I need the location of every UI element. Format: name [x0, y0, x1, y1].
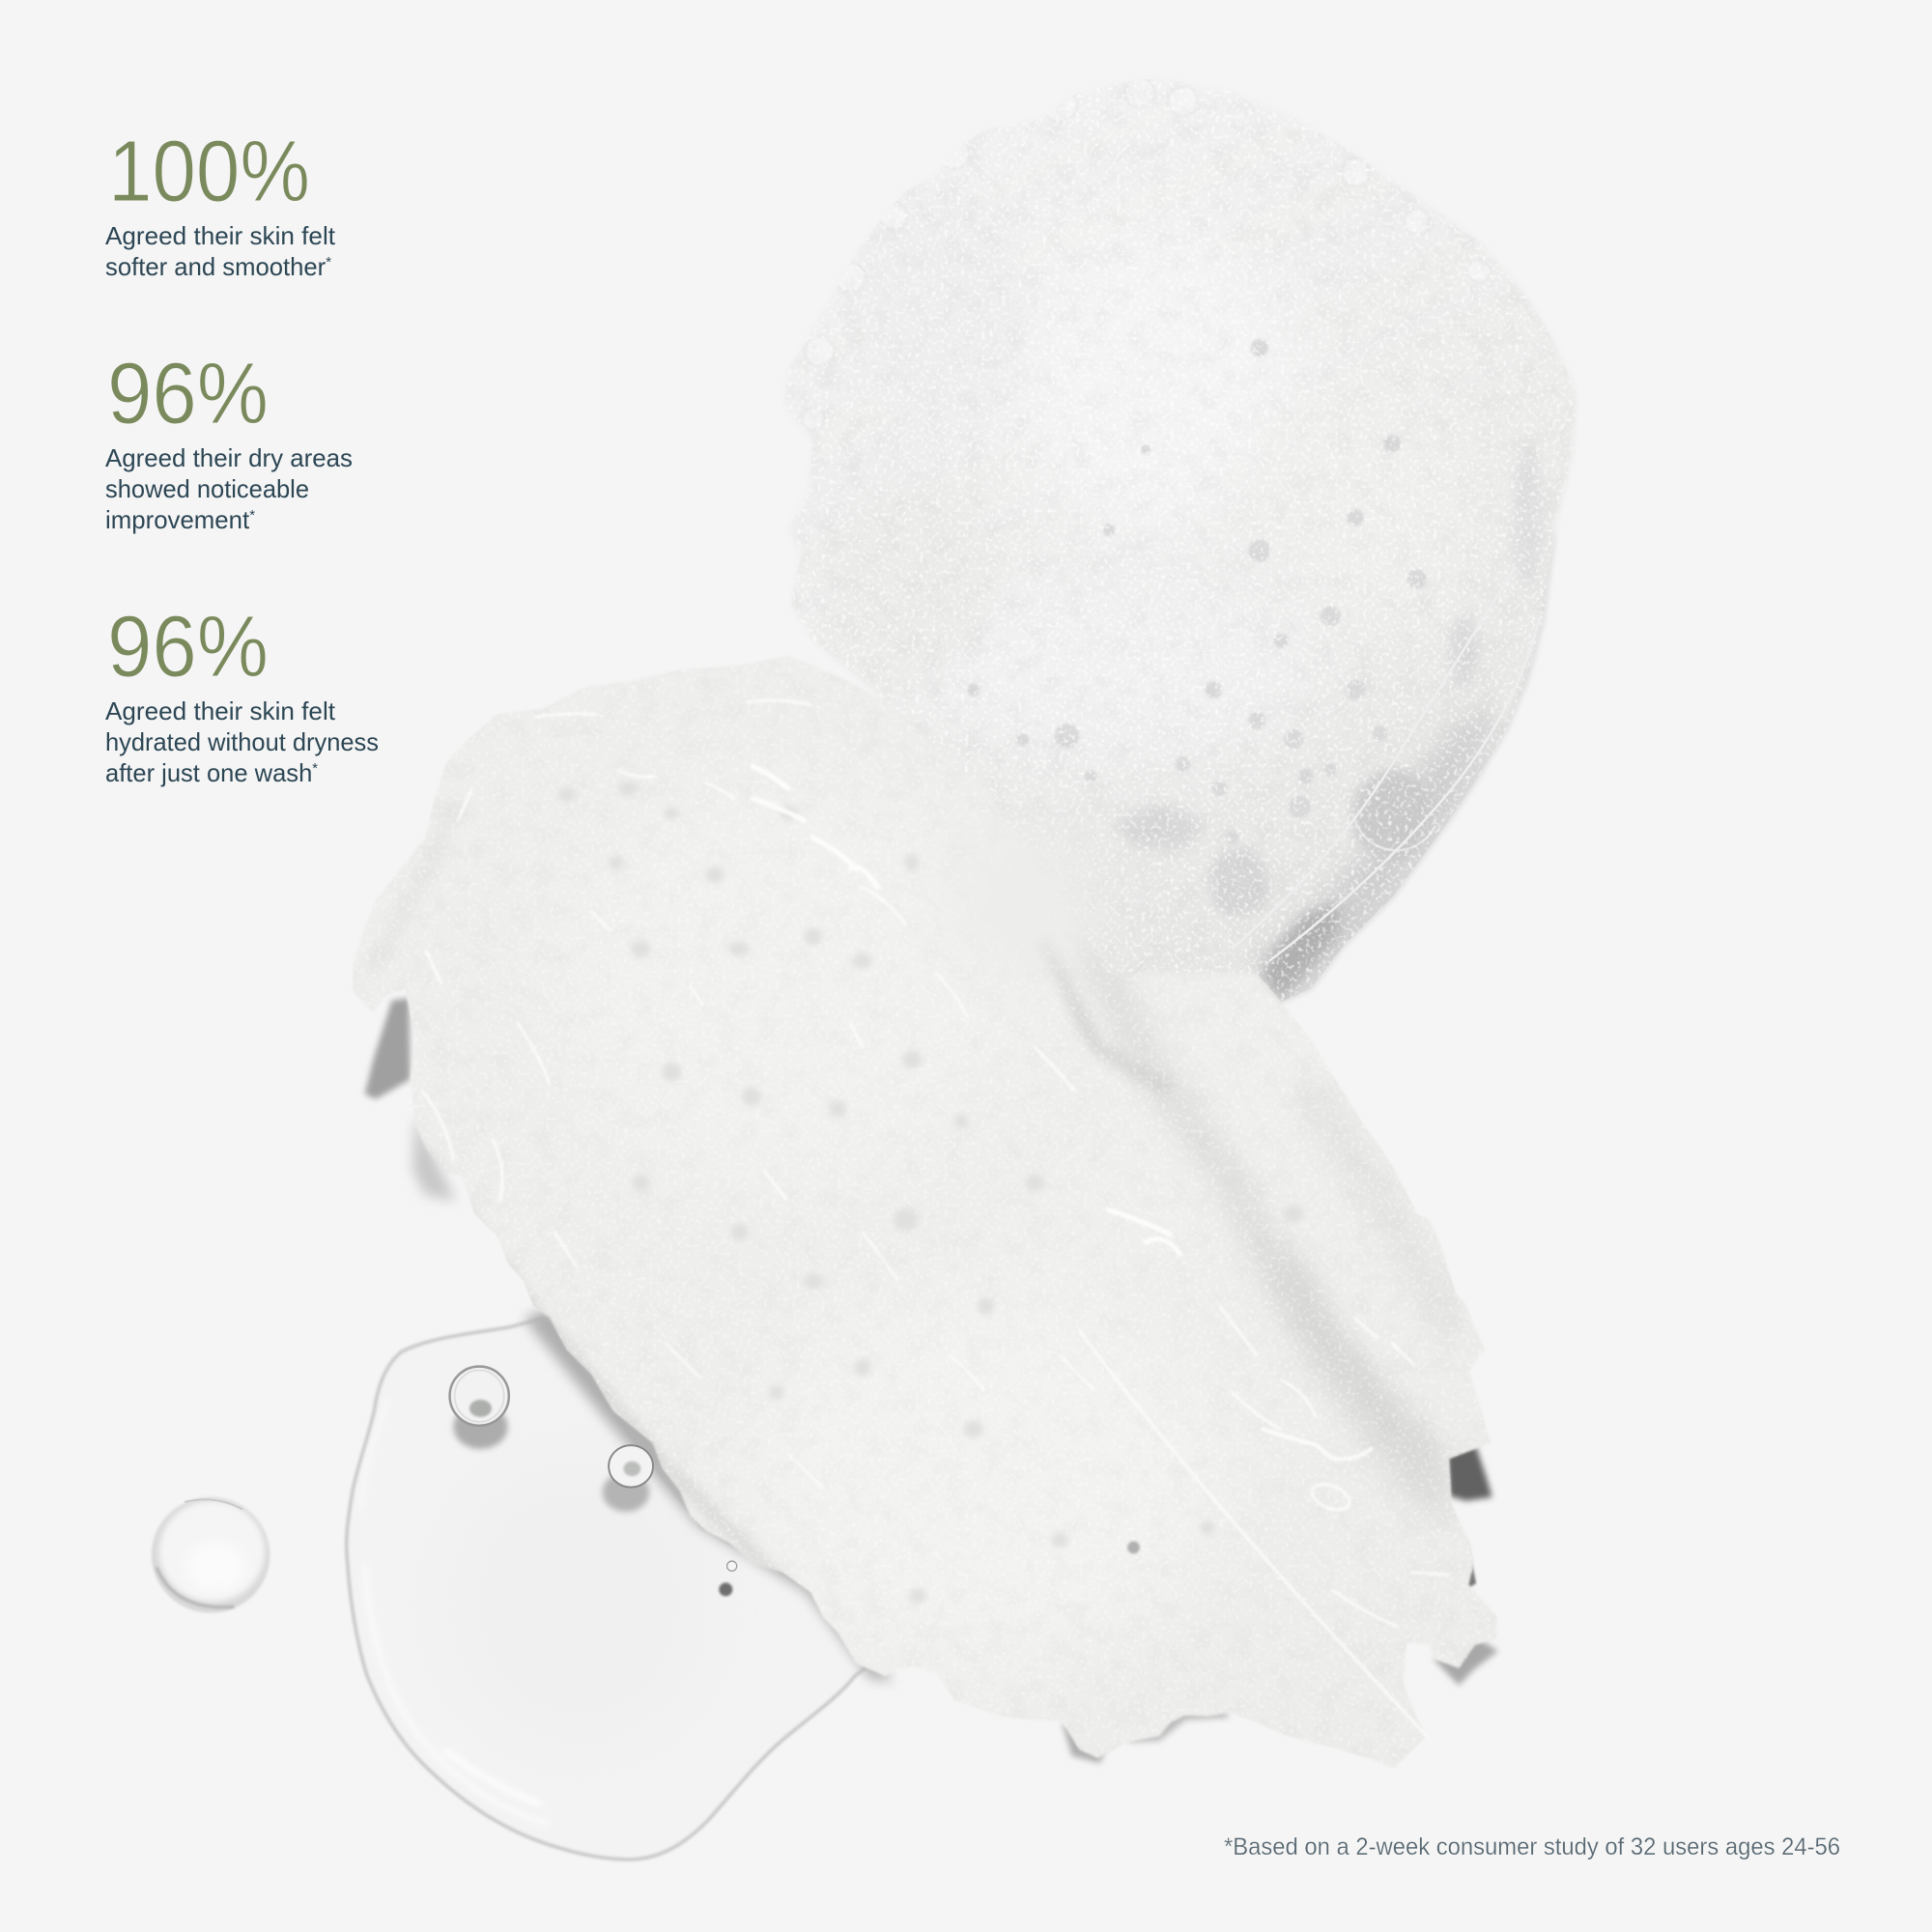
tiny bubble and dot — [719, 1561, 737, 1596]
stat 2 description — [105, 443, 353, 534]
foam tonal modelling — [1010, 222, 1306, 542]
bubble 2 — [603, 1445, 653, 1512]
stat 1 description: * — [326, 254, 331, 270]
stat 3 description: Agreed their skin felt — [105, 696, 336, 725]
drop shadows under scrub — [365, 998, 1498, 1763]
stat 3 description: hydrated without dryness — [105, 727, 379, 756]
tonal modelling — [554, 777, 1023, 1195]
product photo: foam, scrub and liquid — [152, 62, 1589, 1860]
faint foam bubble rings — [1346, 684, 1347, 696]
glossy highlights — [421, 700, 1449, 1736]
stat 1 number: 100% — [108, 124, 310, 220]
foam outer grey rim — [1260, 529, 1555, 1002]
stat 2 description: showed noticeable — [105, 474, 309, 503]
stat 3 number: 96% — [107, 599, 269, 696]
footnote: *Based on a 2-week consumer study of 32 users ages 24-56 — [1224, 1833, 1840, 1861]
stat 1 description: Agreed their skin felt — [105, 221, 336, 250]
stat 3 description: * — [312, 760, 318, 777]
stat 2 number: 96% — [107, 346, 269, 442]
droplet — [152, 1497, 270, 1613]
stat 1 description: softer and smoother — [105, 252, 328, 281]
stat 2 description: improvement — [105, 505, 250, 534]
scrub blob — [332, 640, 1516, 1786]
large translucent bubbles at the lower edge — [1257, 708, 1497, 1002]
left and top edge rim bubbles — [802, 77, 1490, 430]
foam to scrub blend — [949, 826, 1096, 974]
stat 2 — [105, 346, 353, 534]
stat 3 — [105, 599, 379, 787]
stat 3 description — [105, 696, 379, 787]
scrub pits — [558, 781, 1303, 1603]
foam blob — [777, 62, 1589, 1023]
mid bubbles — [967, 339, 1427, 844]
stat 2 description: * — [249, 507, 255, 524]
stat 3 description: after just one wash — [105, 758, 316, 787]
stat 1 — [105, 124, 336, 281]
shadow of scrub on liquid — [524, 1306, 894, 1682]
white lattice over lower foam — [1233, 567, 1540, 961]
stat 1 description — [105, 221, 336, 281]
stat 2 description: Agreed their dry areas — [105, 443, 353, 472]
liquid pool — [347, 1319, 887, 1860]
bubble 1 — [450, 1367, 509, 1449]
